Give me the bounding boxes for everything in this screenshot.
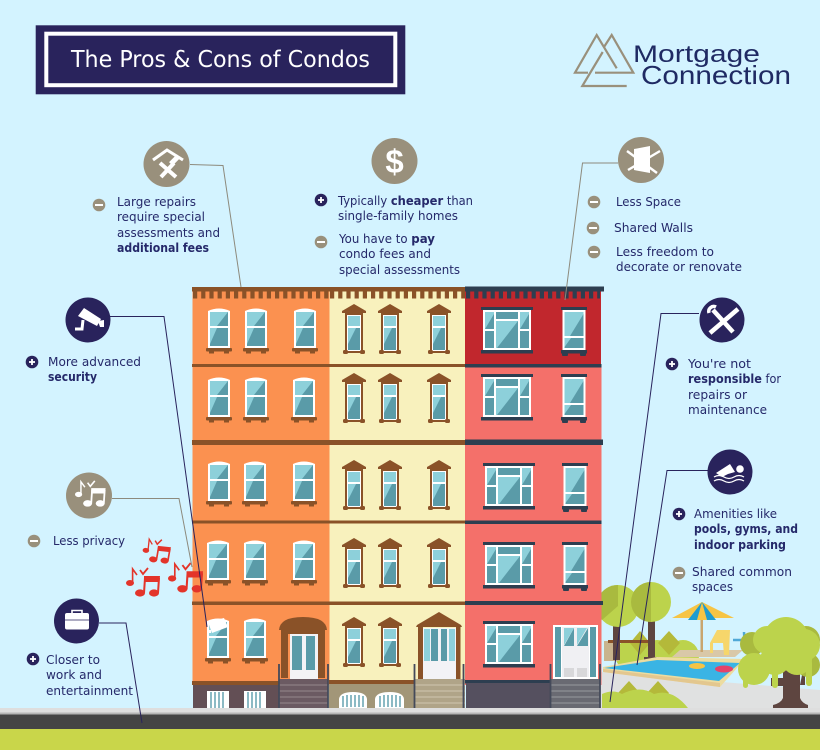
text block: maintenance: maintenance (688, 402, 767, 417)
text block: cost (315, 193, 473, 277)
text block: maintenance: responsible for (688, 371, 782, 386)
building: yellow section (329, 287, 466, 708)
logo: Mortgage Connection: Mortgage (633, 41, 760, 68)
title (36, 25, 405, 94)
icon: security camera (66, 298, 110, 342)
big tree (738, 617, 820, 708)
text block: amenities: Shared common (692, 564, 792, 579)
floor lines (192, 364, 330, 685)
text block: security: More advanced (48, 354, 141, 369)
text block: maintenance (666, 356, 782, 417)
connector lines (99, 163, 708, 723)
text block: amenities: pools, gyms, and (694, 521, 798, 536)
icon: house and tools (144, 141, 190, 187)
text block: large repairs: additional fees (117, 240, 209, 255)
text block: large repairs (93, 194, 220, 255)
tree left (597, 585, 639, 660)
basement (193, 685, 279, 708)
shed bench (604, 641, 619, 661)
logo: Mortgage Connection: Connection (641, 60, 791, 90)
lounge chair (710, 630, 730, 655)
sidewalk and road (0, 708, 820, 750)
title: The Pros & Cons of Condos (70, 45, 370, 73)
text block: space: Shared Walls (614, 220, 693, 235)
cornice (192, 287, 330, 295)
pool (603, 657, 745, 687)
basement (466, 683, 550, 708)
door (279, 617, 327, 679)
text block: space (587, 194, 742, 274)
icon: music notes (66, 472, 112, 518)
text block: security (26, 354, 141, 384)
text block: space: Less freedom to (616, 244, 714, 259)
patio and umbrella (672, 602, 743, 657)
icon: dollar: $ (385, 143, 404, 180)
tree middle (631, 582, 671, 660)
bushes front (602, 681, 688, 708)
icon: briefcase (54, 598, 99, 644)
text block: space: Less Space (616, 194, 681, 209)
icon: swimmer (708, 450, 752, 494)
door (416, 612, 462, 679)
text block: large repairs: Large repairs (117, 194, 196, 209)
text block: amenities: spaces (692, 579, 733, 594)
text block: privacy: Less privacy (53, 533, 126, 548)
text block: cost: special assessments (339, 262, 460, 277)
floor lines (329, 364, 465, 684)
text block: cost: condo fees and (339, 246, 431, 261)
icon: no walls (618, 137, 664, 183)
logo: Mortgage Connection (575, 35, 791, 90)
text block: maintenance: You're not (687, 356, 751, 371)
steps (550, 664, 600, 708)
text block: maintenance: repairs or (688, 387, 748, 402)
text block: location (27, 652, 133, 698)
text block: cost: You have to pay (338, 231, 435, 246)
bushes behind pool (615, 631, 699, 672)
text block: large repairs: assessments and (117, 225, 220, 240)
icon: wrench and screwdriver (700, 298, 744, 342)
floor lines (465, 364, 603, 684)
door (553, 625, 598, 679)
windows (205, 308, 318, 664)
swimmer figure (733, 632, 745, 652)
icon: dollar (372, 138, 418, 184)
text block: amenities: indoor parking (694, 537, 786, 552)
camera on window (207, 618, 228, 633)
building: red section (465, 286, 604, 708)
text block: location: work and (46, 667, 102, 682)
text block: security: security (48, 369, 97, 384)
yard and pool scene (597, 582, 820, 708)
text block: space: decorate or renovate (616, 259, 742, 274)
red music notes (126, 538, 203, 597)
text block: location: Closer to (46, 652, 100, 667)
text block: amenities: Amenities like (694, 506, 777, 521)
cornice (329, 287, 466, 295)
text block: large repairs: require special (117, 209, 205, 224)
text block: amenities (673, 506, 798, 594)
text block: cost: single-family homes (338, 208, 458, 223)
basement (329, 684, 414, 708)
text block: cost: Typically cheaper than (337, 193, 473, 208)
text block: location: entertainment (46, 683, 133, 698)
windows (481, 307, 588, 668)
steps (414, 664, 465, 708)
cornice (465, 286, 604, 295)
building: orange section (192, 287, 330, 708)
windows (342, 304, 451, 667)
steps (279, 664, 328, 708)
